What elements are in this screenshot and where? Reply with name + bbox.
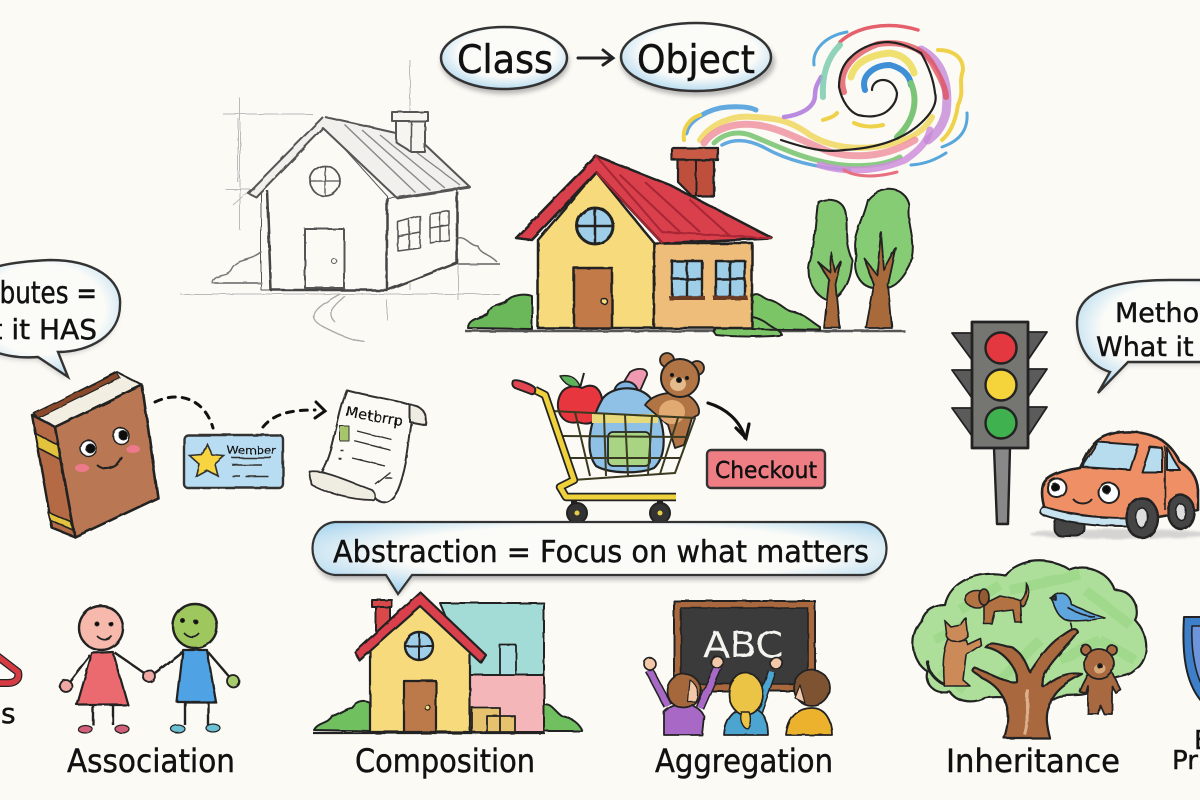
handle [512,380,535,394]
roof [355,592,486,663]
right bands: purple, yellow, blue [921,50,947,140]
bottom band: pink [844,170,897,176]
dog [965,583,1028,624]
frame [535,390,676,510]
checkout button [707,450,825,488]
basket wires [552,411,695,480]
main band: warm [700,117,932,148]
bird [1050,593,1105,630]
Class bubble [441,27,569,94]
dashed arrow: card to scroll [263,402,325,427]
inheritance tree with animals [913,561,1146,738]
wheels [1126,495,1194,538]
title: Class to Object [441,23,775,96]
chimney [372,600,392,640]
member card: Wember [227,444,276,457]
trunk [973,629,1082,738]
child: blue [724,657,782,735]
rainbow smoke swirl [684,26,967,176]
speech bubble: methods [1077,280,1200,396]
person: pink [60,606,147,733]
shield icon cut off at right edge [1183,617,1200,705]
crown [913,561,1146,702]
traffic light [952,322,1047,524]
swirl ink line [781,42,936,151]
colored house: object [465,148,913,336]
label: Composition: Composition [355,742,535,780]
bumper [1044,511,1128,522]
dashed arrow: book to card [155,397,213,428]
label: cut-off at left edge: s [1,697,16,730]
door [574,268,612,328]
Class bubble: Class [457,38,553,83]
front wall [538,172,654,328]
spine [32,415,75,537]
arrow: class to object [578,50,613,65]
member card [184,435,283,488]
face [1048,478,1119,504]
backpack [590,382,664,472]
pages [32,372,142,427]
composition house [313,592,582,733]
label: cut-off at right edge, line 2: Pr [1172,746,1198,776]
Object bubble [621,23,775,96]
association: two people holding hands [60,604,239,733]
cover [55,385,158,537]
top band: blue [686,107,756,133]
chalkboard: ABC [703,625,783,666]
bear [1080,645,1121,714]
book tag behind backpack [622,369,647,400]
speech bubble: attributes [0,260,120,380]
car character [1030,432,1200,539]
child: purple [644,656,723,735]
roof [516,156,772,243]
shopping cart [512,353,704,523]
round window [577,208,613,244]
bushes [314,701,582,731]
label: Association: Association [67,742,235,780]
back room: pink [470,675,544,732]
teddy bear [645,353,704,448]
trees [809,189,913,328]
boxes [472,708,515,732]
bushes [468,295,532,329]
person: green and blue [143,604,239,733]
chimney [678,160,714,196]
face [75,428,140,472]
Object bubble: Object [637,38,755,83]
top arcs: red and blue [840,26,918,42]
left arcs: purple and teal [784,77,821,117]
windows [669,261,748,298]
book character [32,372,158,537]
label: Inheritance: Inheritance [946,742,1120,780]
membership scroll: Metbrrp [344,404,404,430]
chalkboard [674,601,815,691]
windows [1082,442,1180,472]
visors [952,332,1047,436]
checkout button: Checkout [715,458,817,484]
body [1042,432,1198,522]
wheels [567,503,587,523]
label: Aggregation: Aggregation [655,742,833,780]
rear wheel [1054,516,1084,536]
side wall [654,243,752,328]
speech bubble: abstraction: Abstraction = Focus on what matters [333,535,869,570]
aggregation: children at chalkboard [644,601,832,735]
back room: teal [440,603,544,675]
front wall [370,604,470,732]
membership scroll [310,390,426,502]
ground line [465,330,905,332]
sketch house: class blueprint [180,60,500,342]
spiral colours [842,43,946,97]
icon: star [190,444,224,476]
apple [558,373,602,424]
cat [927,618,981,686]
cut-off red icon at left edge [0,652,18,683]
child: yellow [786,670,832,735]
arrow: cart to checkout [708,403,749,438]
speech bubble: abstraction [312,522,887,596]
